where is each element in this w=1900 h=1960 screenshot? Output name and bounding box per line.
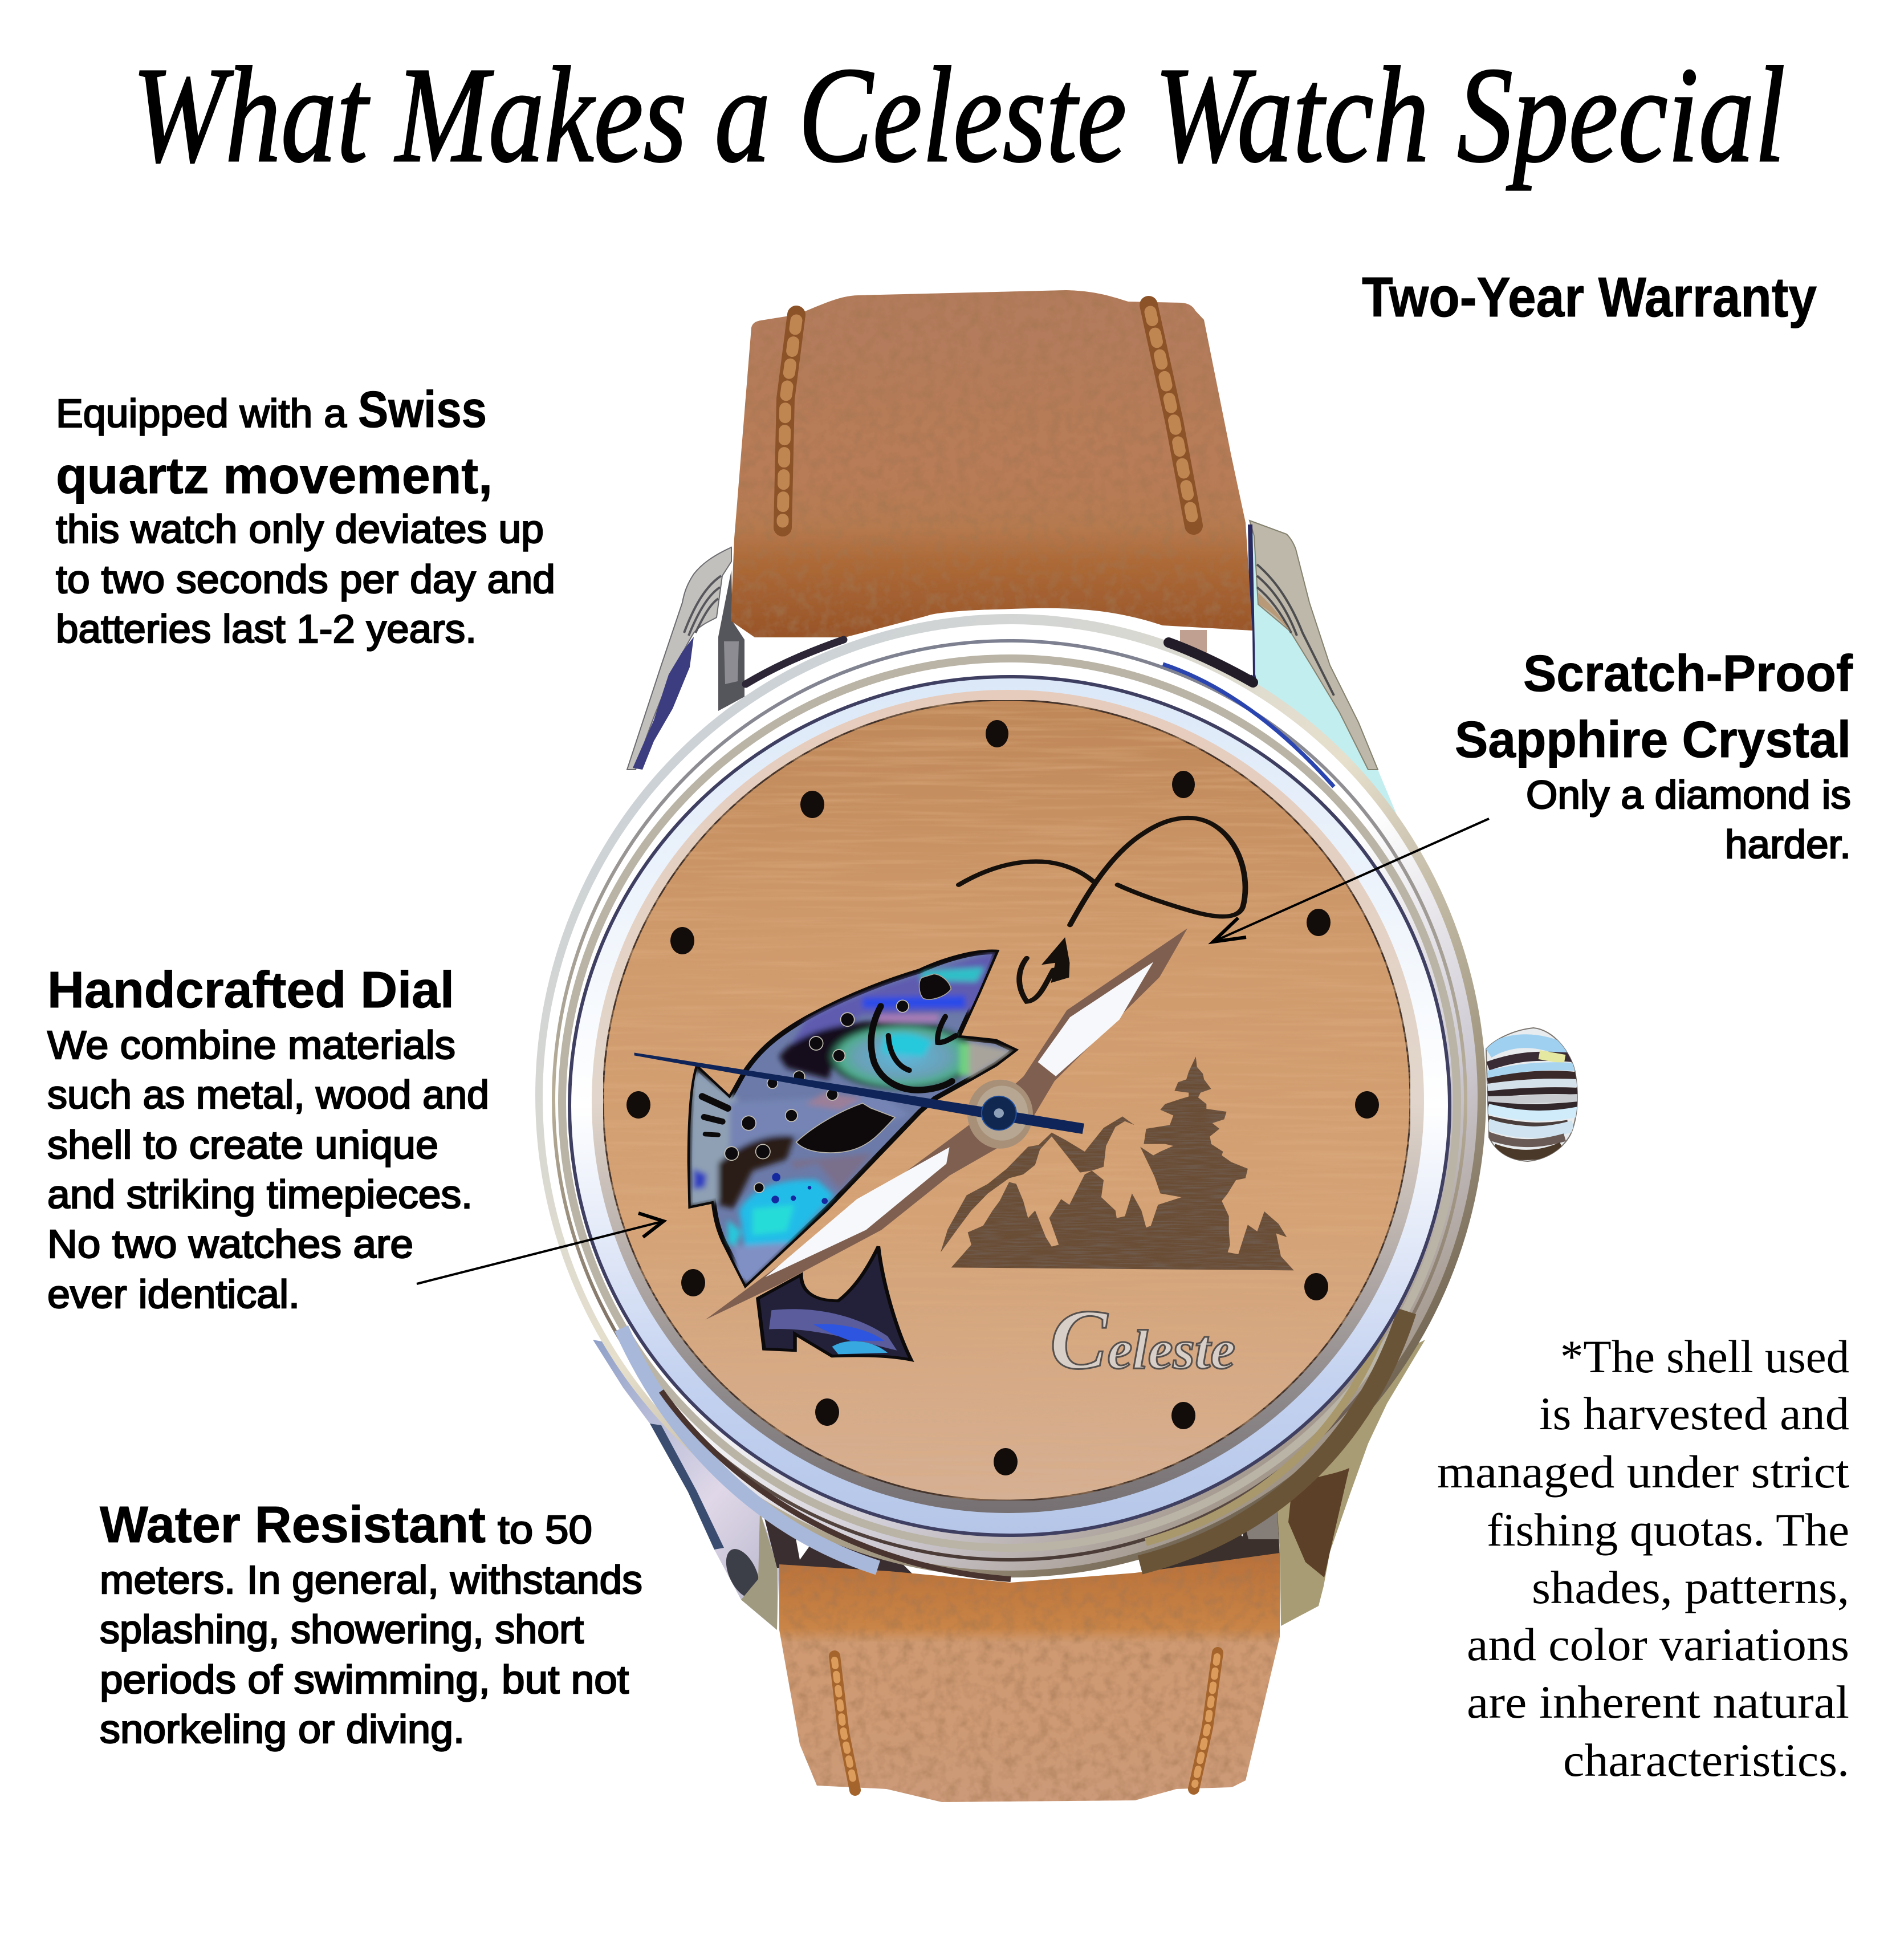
dial artwork (634, 818, 1245, 1360)
text block: water resistant: meters. In general, withstands (100, 1558, 642, 1602)
watch case (535, 614, 1486, 1579)
bottom leather strap (779, 1553, 1280, 1802)
text block: handcrafted dial: We combine materials (47, 1023, 455, 1067)
hour markers (626, 720, 1379, 1475)
text block: shell note: is harvested and (1539, 1388, 1849, 1439)
top left lug (604, 547, 798, 844)
text block: water resistant: snorkeling or diving. (100, 1707, 465, 1751)
bottom lug openings (761, 1499, 1280, 1585)
text block: water resistant: periods of swimming, but not (100, 1657, 629, 1702)
text block: handcrafted dial: ever identical. (47, 1272, 300, 1316)
text block: water resistant: to 50 (498, 1507, 592, 1552)
text block: handcrafted dial: and striking timepieces. (47, 1172, 473, 1217)
text block: swiss quartz movement: this watch only deviates up (56, 507, 544, 551)
arrow: handcrafted dial (417, 1213, 664, 1284)
text block: scratch-proof sapphire crystal: Sapphire Crystal (1455, 711, 1851, 768)
brand logo: Celeste (1050, 1292, 1235, 1387)
text block: shell note: managed under strict (1437, 1446, 1849, 1498)
text block: shell note: and color variations (1467, 1619, 1849, 1670)
text block: shell note: *The shell used (1560, 1331, 1849, 1382)
text block: handcrafted dial: No two watches are (47, 1222, 413, 1266)
text block: scratch-proof sapphire crystal (1455, 645, 1853, 867)
text block: water resistant (100, 1497, 642, 1751)
text block: water resistant: splashing, showering, short (100, 1607, 584, 1652)
crown (1486, 1028, 1579, 1161)
top right lug (1250, 521, 1414, 855)
text block: shell note: shades, patterns, (1532, 1562, 1849, 1613)
text block: scratch-proof sapphire crystal: Scratch-Proof (1523, 645, 1853, 702)
text block: handcrafted dial: such as metal, wood and (47, 1072, 489, 1117)
fish inlay (690, 952, 1015, 1284)
top lug openings (745, 630, 1253, 684)
dark strap edge frame (746, 640, 1253, 684)
watch hands (634, 928, 1187, 1320)
mountains and trees engraving (941, 1056, 1294, 1270)
text block: shell note (1437, 1331, 1849, 1786)
stitching (835, 1653, 1218, 1790)
fish tail (758, 1246, 911, 1360)
text block: swiss quartz movement: to two seconds per day and (56, 557, 555, 601)
text block: handcrafted dial (47, 962, 489, 1316)
bottom left lug (593, 1340, 855, 1630)
text block: scratch-proof sapphire crystal: Only a diamond is (1526, 772, 1851, 817)
bottom right lug (1254, 1340, 1425, 1626)
text block: handcrafted dial: shell to create unique (47, 1123, 438, 1167)
arrow: scratch-proof crystal (1213, 819, 1489, 942)
heading: two-year warranty: Two-Year Warranty (1362, 266, 1817, 328)
text block: shell note: characteristics. (1563, 1734, 1849, 1786)
text block: scratch-proof sapphire crystal: harder. (1725, 822, 1851, 867)
stitching (783, 305, 1194, 527)
top leather strap (731, 290, 1252, 637)
text block: swiss quartz movement (56, 381, 555, 651)
text block: swiss quartz movement: Equipped with a (56, 391, 347, 436)
text block: shell note: fishing quotas. The (1487, 1504, 1849, 1556)
text block: shell note: are inherent natural (1467, 1676, 1849, 1728)
text block: water resistant: Water Resistant (100, 1497, 486, 1554)
text block: swiss quartz movement: batteries last 1-2 years. (56, 607, 477, 651)
watch illustration (535, 290, 1579, 1802)
text block: swiss quartz movement: quartz movement, (56, 448, 493, 505)
text block: handcrafted dial: Handcrafted Dial (47, 962, 454, 1019)
fishing line and hook (959, 818, 1245, 1002)
text block: swiss quartz movement: Swiss (358, 381, 487, 438)
